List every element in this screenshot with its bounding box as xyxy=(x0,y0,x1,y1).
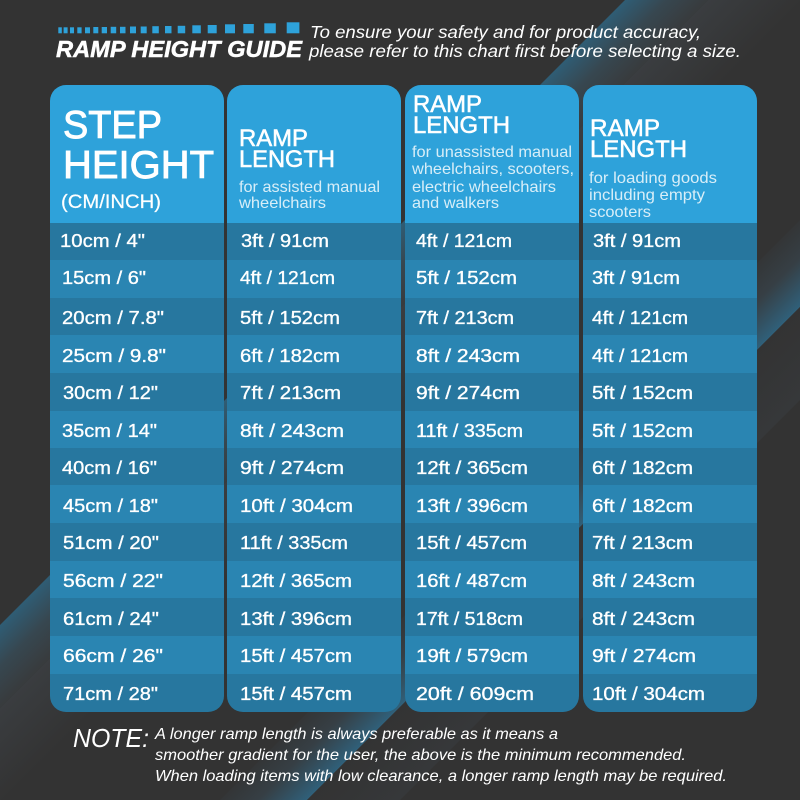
assisted ramp length values: 8ft / 243cm xyxy=(240,420,344,441)
heading: ramp length unassisted: and walkers xyxy=(412,195,499,212)
loading goods ramp length values: 8ft / 243cm xyxy=(592,570,695,591)
assisted ramp length values: 13ft / 396cm xyxy=(240,608,352,629)
loading goods ramp length values: 5ft / 152cm xyxy=(592,382,693,403)
heading: ramp length assisted xyxy=(238,125,380,212)
step height values: 15cm / 6" xyxy=(62,267,146,288)
loading goods ramp length values: 4ft / 121cm xyxy=(592,307,688,328)
note text: A longer ramp length is always preferable as it means a xyxy=(154,726,558,743)
unassisted ramp length values: 12ft / 365cm xyxy=(416,457,528,478)
unassisted ramp length values: 5ft / 152cm xyxy=(416,267,517,288)
unassisted ramp length values: 4ft / 121cm xyxy=(416,230,512,251)
panel: ramp length for loading goods xyxy=(583,85,757,712)
unassisted ramp length values xyxy=(416,230,534,704)
unassisted ramp length values: 15ft / 457cm xyxy=(416,532,527,553)
loading goods ramp length values xyxy=(592,230,705,704)
assisted ramp length values: 5ft / 152cm xyxy=(240,307,340,328)
heading: step height: (CM/INCH) xyxy=(61,192,161,213)
unassisted ramp length values: 19ft / 579cm xyxy=(416,645,528,666)
assisted ramp length values: 9ft / 274cm xyxy=(240,457,344,478)
note text: When loading items with low clearance, a longer ramp length may be required. xyxy=(155,768,727,785)
step height values: 71cm / 28" xyxy=(63,683,158,704)
panel: step height column xyxy=(50,85,224,712)
panel: ramp length for unassisted wheelchairs, scooters and walkers xyxy=(405,85,579,712)
heading: ramp length unassisted: RAMP xyxy=(413,91,482,118)
heading: ramp length unassisted: electric wheelchairs xyxy=(412,179,556,196)
note label: NOTE: xyxy=(73,723,149,753)
intro text: To ensure your safety and for product accuracy, xyxy=(310,22,701,42)
unassisted ramp length values: 9ft / 274cm xyxy=(416,382,520,403)
step height values: 25cm / 9.8" xyxy=(62,345,166,366)
loading goods ramp length values: 8ft / 243cm xyxy=(592,608,695,629)
note text: smoother gradient for the user, the above is the minimum recommended. xyxy=(155,747,686,764)
heading: ramp length assisted: for assisted manual xyxy=(239,179,380,196)
loading goods ramp length values: 6ft / 182cm xyxy=(592,495,693,516)
step height values: 61cm / 24" xyxy=(63,608,159,629)
heading: ramp length unassisted: LENGTH xyxy=(413,112,510,139)
step height values: 30cm / 12" xyxy=(63,382,158,403)
step height values: 56cm / 22" xyxy=(63,570,163,591)
loading goods ramp length values: 7ft / 213cm xyxy=(592,532,693,553)
assisted ramp length values: 10ft / 304cm xyxy=(240,495,353,516)
step height values: 40cm / 16" xyxy=(62,457,157,478)
heading: ramp length loading goods: for loading goods xyxy=(589,170,717,187)
step height values: 10cm / 4" xyxy=(60,230,145,251)
heading: ramp length loading goods: LENGTH xyxy=(590,136,687,163)
loading goods ramp length values: 3ft / 91cm xyxy=(593,230,681,251)
heading: ramp length assisted: LENGTH xyxy=(239,146,335,173)
unassisted ramp length values: 17ft / 518cm xyxy=(416,608,523,629)
note text xyxy=(154,726,727,785)
step height values: 20cm / 7.8" xyxy=(62,307,164,328)
loading goods ramp length values: 10ft / 304cm xyxy=(592,683,705,704)
heading: ramp length unassisted xyxy=(411,91,574,212)
heading: step height: HEIGHT xyxy=(63,144,214,187)
loading goods ramp length values: 5ft / 152cm xyxy=(592,420,693,441)
heading: ramp length assisted: wheelchairs xyxy=(238,195,326,212)
step height values: 51cm / 20" xyxy=(63,532,159,553)
step height values: 45cm / 18" xyxy=(63,495,158,516)
title: RAMP HEIGHT GUIDE xyxy=(56,36,303,62)
assisted ramp length values: 12ft / 365cm xyxy=(240,570,352,591)
step height values xyxy=(60,230,166,704)
unassisted ramp length values: 20ft / 609cm xyxy=(416,683,534,704)
heading: ramp length assisted: RAMP xyxy=(239,125,308,152)
decorative stepped squares above title xyxy=(58,22,299,33)
unassisted ramp length values: 16ft / 487cm xyxy=(416,570,527,591)
assisted ramp length values: 15ft / 457cm xyxy=(240,645,352,666)
step height values: 66cm / 26" xyxy=(63,645,163,666)
assisted ramp length values xyxy=(240,230,353,704)
heading: ramp length loading goods: including empty xyxy=(589,187,705,204)
intro text: please refer to this chart first before selecting a size. xyxy=(308,41,741,61)
assisted ramp length values: 3ft / 91cm xyxy=(241,230,329,251)
unassisted ramp length values: 11ft / 335cm xyxy=(416,420,523,441)
panel: ramp length for assisted manual wheelchairs xyxy=(227,85,401,712)
heading: ramp length loading goods xyxy=(589,115,717,221)
loading goods ramp length values: 4ft / 121cm xyxy=(592,345,688,366)
heading: step height: STEP xyxy=(63,104,162,147)
assisted ramp length values: 4ft / 121cm xyxy=(240,267,335,288)
assisted ramp length values: 15ft / 457cm xyxy=(240,683,352,704)
loading goods ramp length values: 3ft / 91cm xyxy=(592,267,680,288)
heading: ramp length unassisted: for unassisted manual xyxy=(412,144,572,161)
unassisted ramp length values: 8ft / 243cm xyxy=(416,345,520,366)
unassisted ramp length values: 7ft / 213cm xyxy=(416,307,514,328)
assisted ramp length values: 6ft / 182cm xyxy=(240,345,340,366)
heading: ramp length loading goods: RAMP xyxy=(590,115,660,142)
loading goods ramp length values: 6ft / 182cm xyxy=(592,457,693,478)
step height values: 35cm / 14" xyxy=(62,420,157,441)
assisted ramp length values: 11ft / 335cm xyxy=(240,532,348,553)
heading: step height xyxy=(61,104,214,213)
intro text xyxy=(308,22,741,61)
assisted ramp length values: 7ft / 213cm xyxy=(240,382,341,403)
unassisted ramp length values: 13ft / 396cm xyxy=(416,495,528,516)
heading: ramp length loading goods: scooters xyxy=(589,204,651,221)
loading goods ramp length values: 9ft / 274cm xyxy=(592,645,696,666)
heading: ramp length unassisted: wheelchairs, scooters, xyxy=(411,161,574,178)
